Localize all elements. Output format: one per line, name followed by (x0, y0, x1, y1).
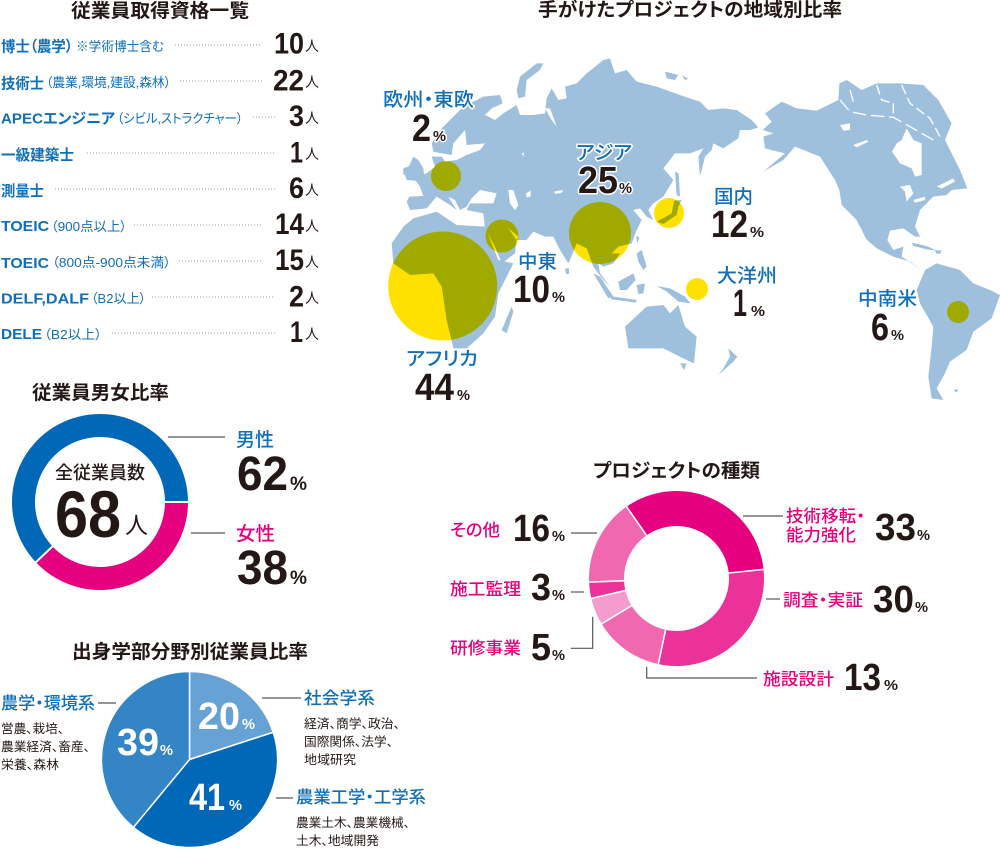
callout: training: % (552, 647, 565, 664)
callout: female: 38 (237, 542, 288, 595)
row: DELE: 1 (290, 316, 303, 349)
panel: regional map (383, 0, 1000, 409)
row: DELF: （B2以上） (91, 291, 146, 306)
title: regional share: 手がけたプロジェクトの地域別比率 (538, 0, 842, 21)
row: DELF: DELF,DALF (1, 290, 89, 308)
row: TOEIC 800: （800点-900点未満） (52, 255, 171, 270)
donut center: total employees: 68 (55, 477, 121, 551)
callout: other (450, 508, 597, 550)
row: DELF: 2 (289, 280, 304, 314)
callout: agriculture: 営農、栽培、 (1, 721, 64, 736)
pie values: 20 (198, 696, 240, 738)
callout: technology transfer: 技術移転・ (786, 507, 865, 526)
bubbles: regional share (388, 161, 969, 340)
row: surveyor (1, 172, 319, 205)
callout: female: % (290, 568, 307, 589)
label: Europe (383, 89, 474, 150)
callout: agriculture: 農業経済、畜産、 (1, 739, 90, 754)
row: TOEIC 800: 15 (275, 244, 304, 277)
label: Africa: 44 (415, 367, 454, 409)
panel: academic background (1, 640, 426, 848)
row: architect: 1 (290, 136, 303, 170)
label: Middle East: % (552, 289, 565, 306)
label: Latin America: 6 (871, 307, 889, 349)
row: DELF (1, 280, 319, 314)
row: engineer: 22 (273, 64, 304, 98)
row: TOEIC 900: （900点以上） (51, 219, 127, 234)
row: surveyor: 測量士 (1, 182, 44, 200)
row: TOEIC 900: 人 (305, 218, 319, 234)
label: Latin America: % (891, 327, 904, 344)
callout: training: 5 (531, 627, 551, 669)
label: Europe: 2 (412, 108, 431, 150)
panel: gender ratio (12, 382, 307, 595)
callout: male: 男性 (236, 429, 274, 451)
label: Europe: 欧州・東欧 (383, 89, 474, 111)
label: Asia: % (619, 180, 632, 197)
callout: technology transfer: 能力強化 (786, 526, 856, 545)
pie values: % (242, 716, 255, 733)
callout: engineering (276, 788, 426, 848)
label: Africa: アフリカ (406, 349, 478, 370)
label: Latin America (858, 288, 917, 349)
label: Asia: 25 (578, 160, 618, 202)
callout: technology transfer (743, 507, 930, 549)
row: APEC: （シビル,ストラクチャー） (117, 111, 243, 126)
row: TOEIC 900 (1, 208, 319, 241)
label: Oceania: % (751, 303, 765, 320)
pie values: % (229, 797, 242, 814)
label: Japan: 12 (711, 204, 748, 246)
label: Japan (711, 186, 764, 246)
label: Africa: % (457, 387, 470, 404)
row: architect: 一級建築士 (1, 146, 74, 164)
label: Asia: アジア (576, 143, 632, 164)
row: DELF: 人 (305, 290, 319, 306)
panel: qualifications list (1, 0, 319, 349)
row: DELE: 人 (305, 326, 319, 342)
row: DELE (1, 316, 319, 349)
label: Middle East: 中東 (518, 251, 557, 273)
callout: agriculture: 農学・環境系 (1, 694, 95, 713)
callout: male: % (290, 474, 307, 495)
label: Latin America: 中南米 (858, 288, 917, 310)
callout: supervision: 3 (531, 567, 551, 609)
row: doctorate: 博士（農学） (1, 38, 73, 56)
callout: engineering: 農業土木、農業機械、 (296, 815, 410, 830)
label: Europe: % (433, 128, 446, 145)
callout: technology transfer: 33 (875, 507, 916, 549)
callout: supervision: % (552, 587, 565, 604)
label: Oceania (717, 265, 777, 325)
callout: survey: 調査・実証 (783, 591, 863, 610)
callout: technology transfer: % (917, 527, 930, 544)
title: academic background: 出身学部分野別従業員比率 (72, 640, 308, 663)
donut center: total employees: 人 (125, 512, 148, 538)
donut center: total employees (55, 463, 148, 551)
title: project types: プロジェクトの種類 (593, 460, 760, 482)
title: gender: 従業員男女比率 (32, 382, 169, 404)
callout: social sciences: 国際関係、法学、 (304, 734, 393, 749)
row: APEC: 3 (289, 100, 304, 133)
callout: facility design (647, 657, 898, 699)
row: TOEIC 800 (1, 244, 319, 277)
row: TOEIC 900: TOEIC (1, 218, 49, 235)
row: engineer (1, 64, 319, 98)
callout: engineering: 土木、地域開発 (296, 834, 379, 848)
callout: engineering: 農業工学・工学系 (296, 788, 426, 807)
callout: agriculture: 栄養、森林 (1, 757, 59, 772)
callout: supervision (450, 567, 584, 609)
inland water (508, 85, 955, 242)
pie chart: academic background (101, 672, 278, 848)
callout: survey: % (915, 599, 928, 616)
panel: project types (450, 460, 930, 699)
callout: survey (766, 579, 928, 621)
label: Asia (576, 143, 632, 202)
callout: facility design: 13 (844, 657, 881, 699)
callout: male (168, 429, 307, 501)
callout: social sciences: 地域研究 (304, 753, 357, 767)
row: DELE: DELE (1, 326, 42, 343)
donut chart: project types (588, 491, 765, 666)
callout: social sciences: 経済、商学、政治、 (304, 716, 400, 731)
callout: social sciences: 社会学系 (304, 689, 375, 708)
row: doctorate: 人 (305, 38, 319, 54)
label: Japan: 国内 (714, 186, 753, 208)
label: Oceania: 大洋州 (717, 265, 777, 287)
callout: training (450, 617, 593, 669)
pie values: 39 (117, 722, 159, 764)
label: Middle East: 10 (513, 269, 550, 311)
row: architect (1, 136, 319, 170)
callout: survey: 30 (873, 579, 914, 621)
label: Africa (406, 349, 478, 409)
row: architect: 人 (305, 146, 319, 162)
row: surveyor: 6 (289, 172, 304, 205)
row: TOEIC 800: 人 (305, 254, 319, 270)
row: DELE: （B2以上） (44, 327, 102, 342)
pie values: 41 (189, 777, 225, 819)
callout: female: 女性 (236, 523, 275, 545)
callout: other: 16 (513, 508, 550, 550)
callout: other: % (552, 528, 565, 545)
callout: agriculture (1, 694, 116, 772)
row: doctorate (1, 28, 319, 60)
row: TOEIC 900: 14 (275, 208, 304, 241)
row: doctorate: 10 (274, 28, 304, 60)
callout: female (191, 523, 307, 595)
row: engineer: （農業,環境,建設,森林） (46, 75, 171, 90)
callout: training: 研修事業 (450, 639, 521, 658)
callout: supervision: 施工監理 (450, 580, 521, 599)
callout: facility design: 施設設計 (763, 670, 834, 689)
label: Middle East (513, 251, 565, 311)
row: engineer: 技術士 (1, 74, 44, 92)
row: APEC: APECエンジニア (1, 110, 115, 128)
world map (392, 58, 1000, 400)
callout: other: その他 (450, 521, 500, 540)
label: Japan: % (750, 224, 764, 241)
row: surveyor: 人 (305, 182, 319, 198)
row: APEC: 人 (305, 110, 319, 126)
pie values (117, 696, 255, 819)
row: engineer: 人 (305, 74, 319, 90)
title: qualifications: 従業員取得資格一覧 (71, 0, 249, 22)
row: APEC (1, 100, 319, 133)
row: doctorate: ※学術博士含む (76, 39, 164, 54)
label: Oceania: 1 (733, 283, 747, 325)
row: TOEIC 800: TOEIC (1, 255, 49, 272)
callout: facility design: % (884, 677, 898, 694)
pie values: % (160, 742, 173, 759)
callout: social sciences (262, 689, 400, 767)
donut center: total employees: 全従業員数 (55, 463, 145, 483)
donut chart: gender (12, 414, 190, 590)
callout: male: 62 (237, 448, 288, 501)
